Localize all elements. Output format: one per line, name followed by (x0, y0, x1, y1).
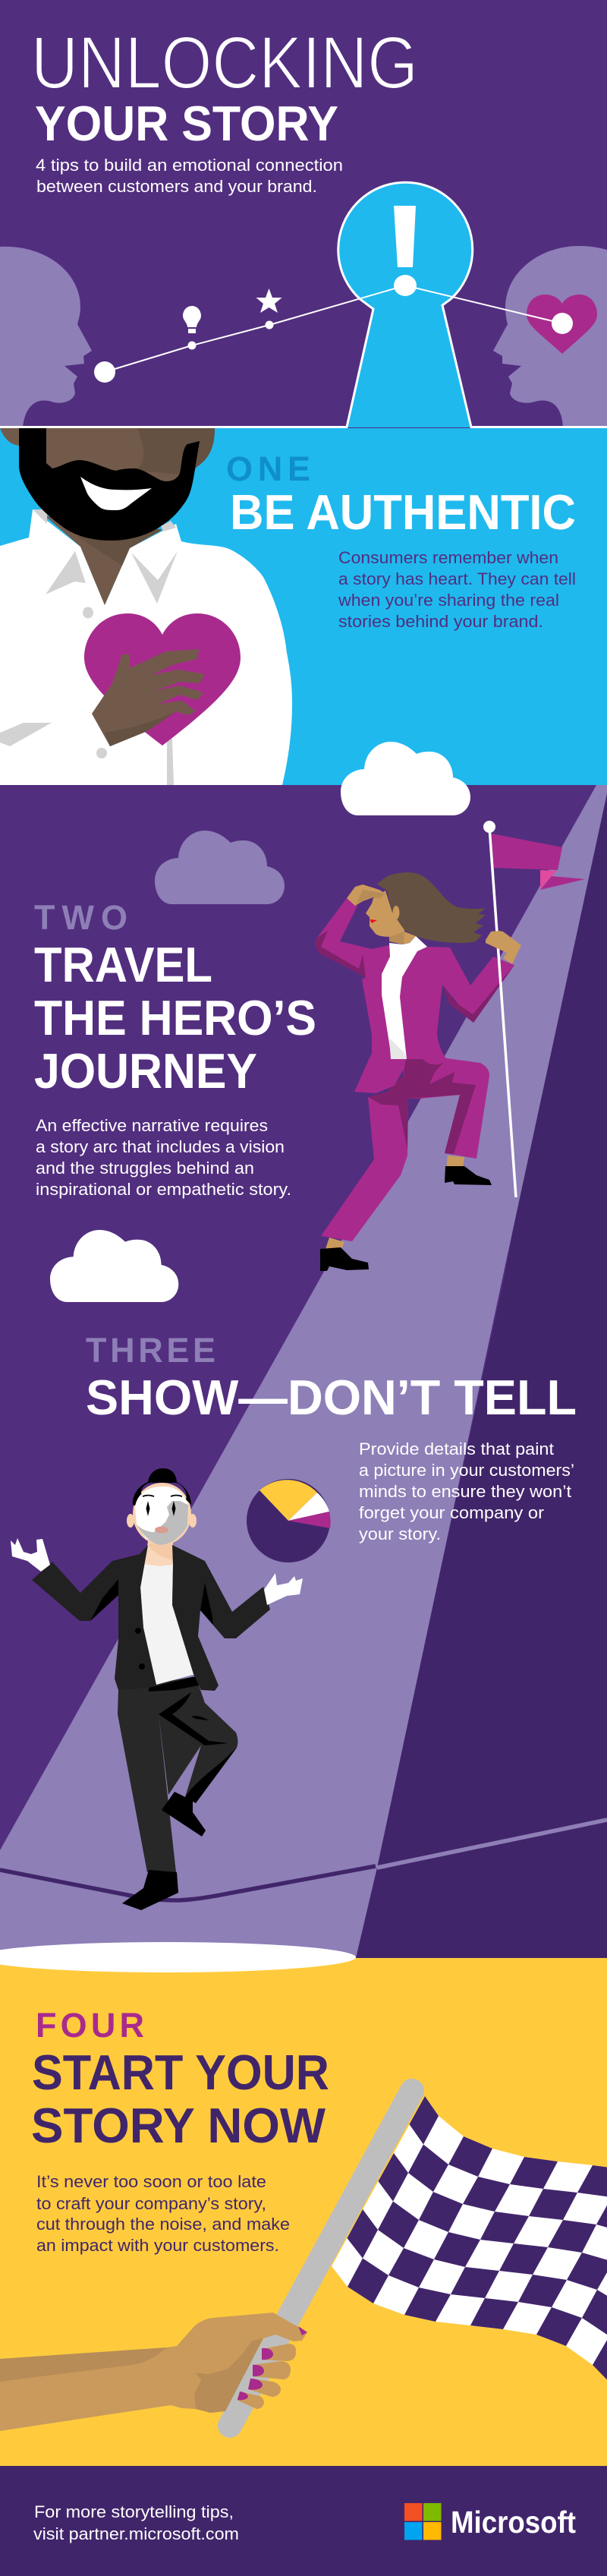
flag (492, 834, 585, 890)
fingers (237, 2344, 296, 2409)
text block: four: an impact with your customers. (36, 2236, 279, 2255)
text block: two: a story arc that includes a vision (36, 1137, 285, 1156)
shoes and ankles (320, 1156, 492, 1271)
heading: four: START YOUR (32, 2045, 329, 2100)
text block: three: minds to ensure they won’t (359, 1482, 571, 1501)
text block: two: inspirational or empathetic story. (36, 1180, 291, 1199)
face (366, 891, 416, 944)
heading: four (31, 2006, 329, 2153)
heading: three: THREE (86, 1331, 215, 1370)
hands (347, 884, 521, 964)
text block: three: your story. (359, 1524, 441, 1543)
icon: white cloud lower (50, 1230, 178, 1302)
heading: two (34, 898, 316, 1099)
Microsoft logo: Microsoft (451, 2505, 576, 2540)
heading: two: TWO (34, 898, 127, 937)
footer text (33, 2502, 239, 2543)
text block: two: An effective narrative requires (36, 1116, 268, 1135)
illustration: mime (11, 1468, 303, 1910)
icon: left head (0, 247, 92, 427)
text block: one: a story has heart. They can tell (338, 569, 576, 588)
text block: one: when you’re sharing the real (338, 591, 559, 610)
mime head (127, 1468, 197, 1545)
title: YOUR STORY (35, 96, 338, 151)
heading: three: SHOW—DON’T TELL (86, 1370, 577, 1425)
heading: two: THE HERO’S (34, 990, 316, 1045)
spotlight ellipse (0, 1942, 356, 1972)
text block: one: stories behind your brand. (338, 612, 543, 631)
text block: four: It’s never too soon or too late (36, 2172, 266, 2191)
panel: tips two and three background (0, 785, 607, 1958)
heading: four: FOUR (36, 2006, 144, 2045)
illustration: checkered flag (230, 2091, 607, 2426)
mime shirt (140, 1561, 196, 1685)
icon: heart in head (527, 295, 597, 354)
mime trousers (118, 1676, 237, 1872)
nails (237, 2326, 307, 2400)
title: UNLOCKING (31, 21, 418, 104)
text block: three: forget your company or (359, 1503, 544, 1522)
heading: one: ONE (226, 449, 310, 488)
heading: two: JOURNEY (34, 1043, 257, 1099)
text block: three: Provide details that paint (359, 1439, 554, 1458)
heading: three (86, 1331, 577, 1425)
title (31, 21, 418, 151)
text block: four: cut through the noise, and make (36, 2215, 290, 2234)
footer text: For more storytelling tips, (34, 2502, 234, 2521)
text block: one: Consumers remember when (338, 548, 558, 567)
heading: two: TRAVEL (34, 937, 212, 992)
mime jacket (32, 1545, 270, 1691)
icon: light bulb (183, 306, 201, 333)
hair (377, 872, 486, 943)
icon: lavender cloud (155, 831, 285, 904)
jacket (315, 898, 514, 1093)
panel: tip four (0, 1958, 607, 2466)
heading: one (226, 449, 576, 540)
flag pole (483, 821, 516, 1197)
mime waistband (149, 1676, 199, 1692)
illustration: climbing woman with flag (315, 821, 585, 1271)
pie chart (247, 1479, 331, 1562)
footer text: visit partner.microsoft.com (33, 2524, 239, 2543)
illustration: hand holding flag (0, 2313, 307, 2431)
text block: four (36, 2172, 290, 2255)
icon: heart (84, 613, 241, 746)
mime gloves (11, 1538, 303, 1605)
text block: three (359, 1439, 574, 1543)
text block: two: and the struggles behind an (36, 1159, 254, 1178)
mime neck (144, 1541, 173, 1566)
icon: right head (493, 246, 607, 427)
panel: footer (0, 2466, 607, 2576)
subtitle: 4 tips to build an emotional connection (36, 156, 343, 175)
text block: two (36, 1116, 291, 1199)
connection line with dots (94, 275, 573, 383)
illustration: bearded man (0, 428, 292, 785)
icon: star (256, 288, 282, 313)
subtitle (36, 156, 343, 196)
icon: hand on heart (92, 649, 205, 746)
Microsoft logo (404, 2503, 576, 2540)
heading: one: BE AUTHENTIC (230, 484, 576, 540)
heading: four: STORY NOW (31, 2098, 326, 2153)
tightrope (0, 1820, 607, 1900)
text block: four: to craft your company’s story, (36, 2194, 266, 2213)
icon: keyhole (0, 182, 607, 427)
panel: tip one (0, 428, 607, 785)
text block: three: a picture in your customers’ (359, 1461, 574, 1480)
subtitle: between customers and your brand. (36, 177, 317, 196)
icon: white cloud top (341, 742, 470, 815)
text block: one (338, 548, 576, 631)
trousers (321, 1058, 489, 1241)
panel: header (0, 0, 607, 428)
mime shoes (122, 1792, 206, 1910)
